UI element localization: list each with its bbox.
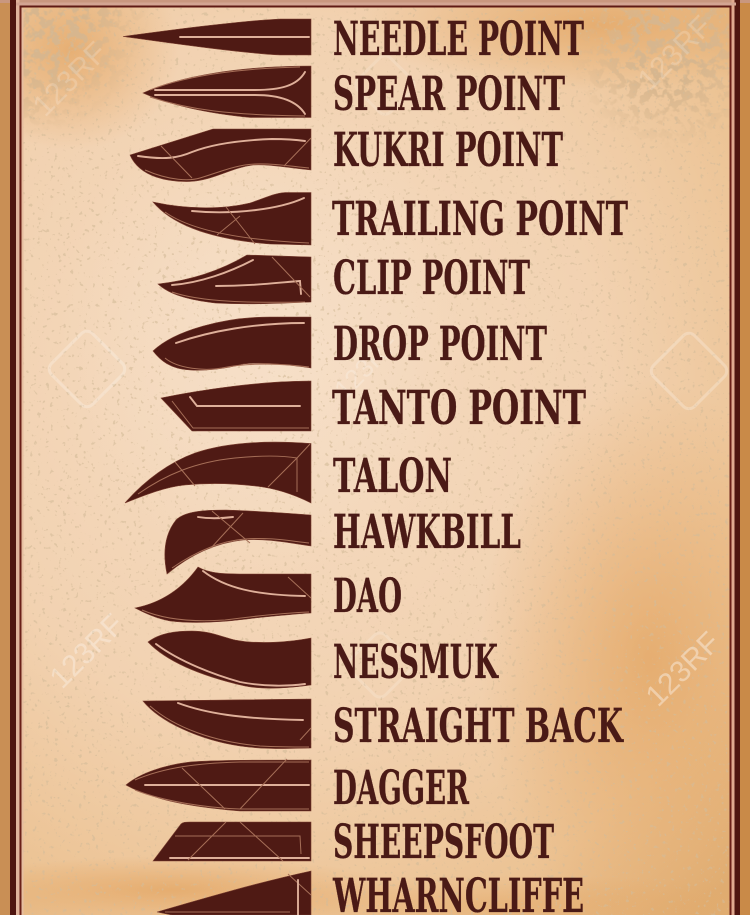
watermarks: 123RF [27, 36, 114, 123]
knife: sheepsfoot [153, 822, 311, 861]
knife: hawkbill [165, 510, 311, 574]
watermarks: 123RF [632, 10, 719, 97]
label: clip point: CLIP POINT [333, 251, 530, 306]
knife: tanto point [161, 381, 311, 431]
label: drop point: DROP POINT [333, 317, 547, 372]
watermarks: 123RF [44, 608, 131, 695]
label: sheepsfoot: SHEEPSFOOT [333, 815, 554, 870]
labels [332, 12, 628, 915]
knife: talon [125, 442, 311, 503]
knife: dao [135, 567, 311, 622]
knife: clip point [158, 255, 311, 304]
watermarks: 123RF [640, 626, 727, 713]
knife: kukri point [130, 129, 311, 182]
label: hawkbill: HAWKBILL [333, 505, 521, 560]
label: needle point: NEEDLE POINT [333, 12, 584, 67]
label: dao: DAO [333, 569, 402, 624]
label: tanto point: TANTO POINT [332, 381, 586, 436]
label: talon: TALON [333, 449, 452, 504]
label: kukri point: KUKRI POINT [333, 123, 563, 178]
label: spear point: SPEAR POINT [333, 67, 565, 122]
knife: drop point [153, 317, 311, 370]
knife: nessmuk [148, 631, 311, 688]
watermarks: 123RF [328, 328, 404, 404]
knife: dagger [126, 759, 311, 811]
knife: wharncliffe [157, 871, 311, 915]
knife: trailing point [153, 192, 311, 245]
knife: spear point [143, 66, 311, 118]
knife: straight back [143, 699, 311, 749]
label: dagger: DAGGER [333, 761, 470, 816]
watermarks [27, 10, 730, 713]
knife: needle point [123, 19, 311, 55]
label: nessmuk: NESSMUK [333, 635, 499, 690]
